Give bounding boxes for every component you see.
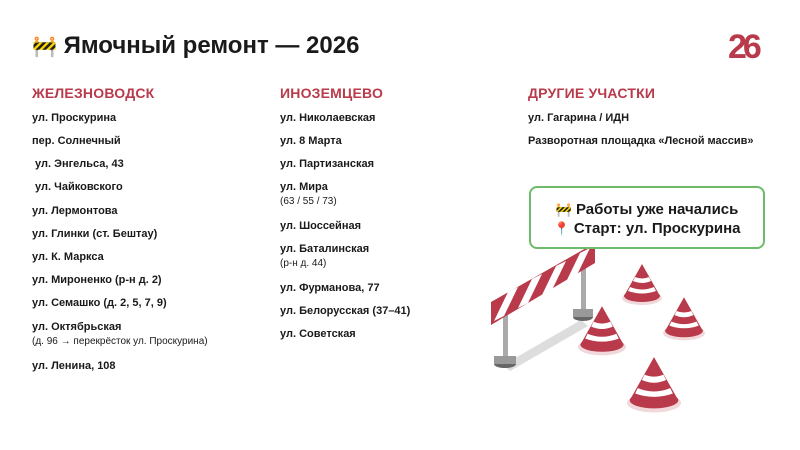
column: Железноводск: ул. Чайковского [35, 181, 123, 193]
column: Иноземцево: ул. Советская [280, 328, 356, 340]
title: 🚧 Ямочный ремонт — 2026 [32, 32, 359, 59]
column: Иноземцево [280, 85, 410, 340]
column: Иноземцево: ул. Партизанская [280, 158, 374, 170]
column: Железноводск: ул. Семашко (д. 2, 5, 7, 9) [32, 297, 167, 309]
column: Железноводск: ул. Ленина, 108 [32, 360, 116, 372]
column: Железноводск: ул. Глинки (ст. Бештау) [32, 228, 157, 240]
column: Иноземцево: ул. Баталинская [280, 243, 369, 255]
column: Иноземцево: ул. Белорусская (37–41) [280, 305, 410, 317]
column: Железноводск: пер. Солнечный [32, 135, 121, 147]
logo 26: 26 [728, 28, 758, 66]
column: Железноводск: ул. К. Маркса [32, 251, 104, 263]
callout: works started [529, 186, 765, 249]
column: Железноводск: (д. 96 → перекрёсток ул. Проскурина) [32, 336, 208, 347]
column: Иноземцево: (63 / 55 / 73) [280, 196, 337, 207]
column: Иноземцево: ул. Мира [280, 181, 328, 193]
callout: works started: 📍 Старт: ул. Проскурина [553, 220, 741, 237]
callout: works started: 🚧 Работы уже начались [556, 201, 738, 218]
illustration: barrier and cones [491, 249, 705, 412]
column: Другие участки: Разворотная площадка «Лесной массив» [528, 135, 754, 147]
heading: ЖЕЛЕЗНОВОДСК [32, 85, 154, 101]
column: Железноводск: ул. Октябрьская [32, 321, 121, 333]
column: Иноземцево: (р-н д. 44) [280, 258, 326, 269]
column: Железноводск: ул. Лермонтова [32, 205, 118, 217]
column: Иноземцево: ул. 8 Марта [280, 135, 342, 147]
column: Железноводск [32, 85, 208, 372]
column: Другие участки: ул. Гагарина / ИДН [528, 112, 629, 124]
cones [578, 264, 705, 412]
column: Железноводск: ул. Проскурина [32, 112, 116, 124]
heading: ДРУГИЕ УЧАСТКИ [528, 85, 655, 101]
column: Иноземцево: ул. Николаевская [280, 112, 375, 124]
column: Иноземцево: ул. Фурманова, 77 [280, 282, 380, 294]
column: Иноземцево: ул. Шоссейная [280, 220, 361, 232]
heading: ИНОЗЕМЦЕВО [280, 85, 383, 101]
column: Другие участки [528, 85, 754, 147]
barrier [491, 243, 595, 371]
column: Железноводск: ул. Энгельса, 43 [35, 158, 124, 170]
column: Железноводск: ул. Мироненко (р-н д. 2) [32, 274, 162, 286]
